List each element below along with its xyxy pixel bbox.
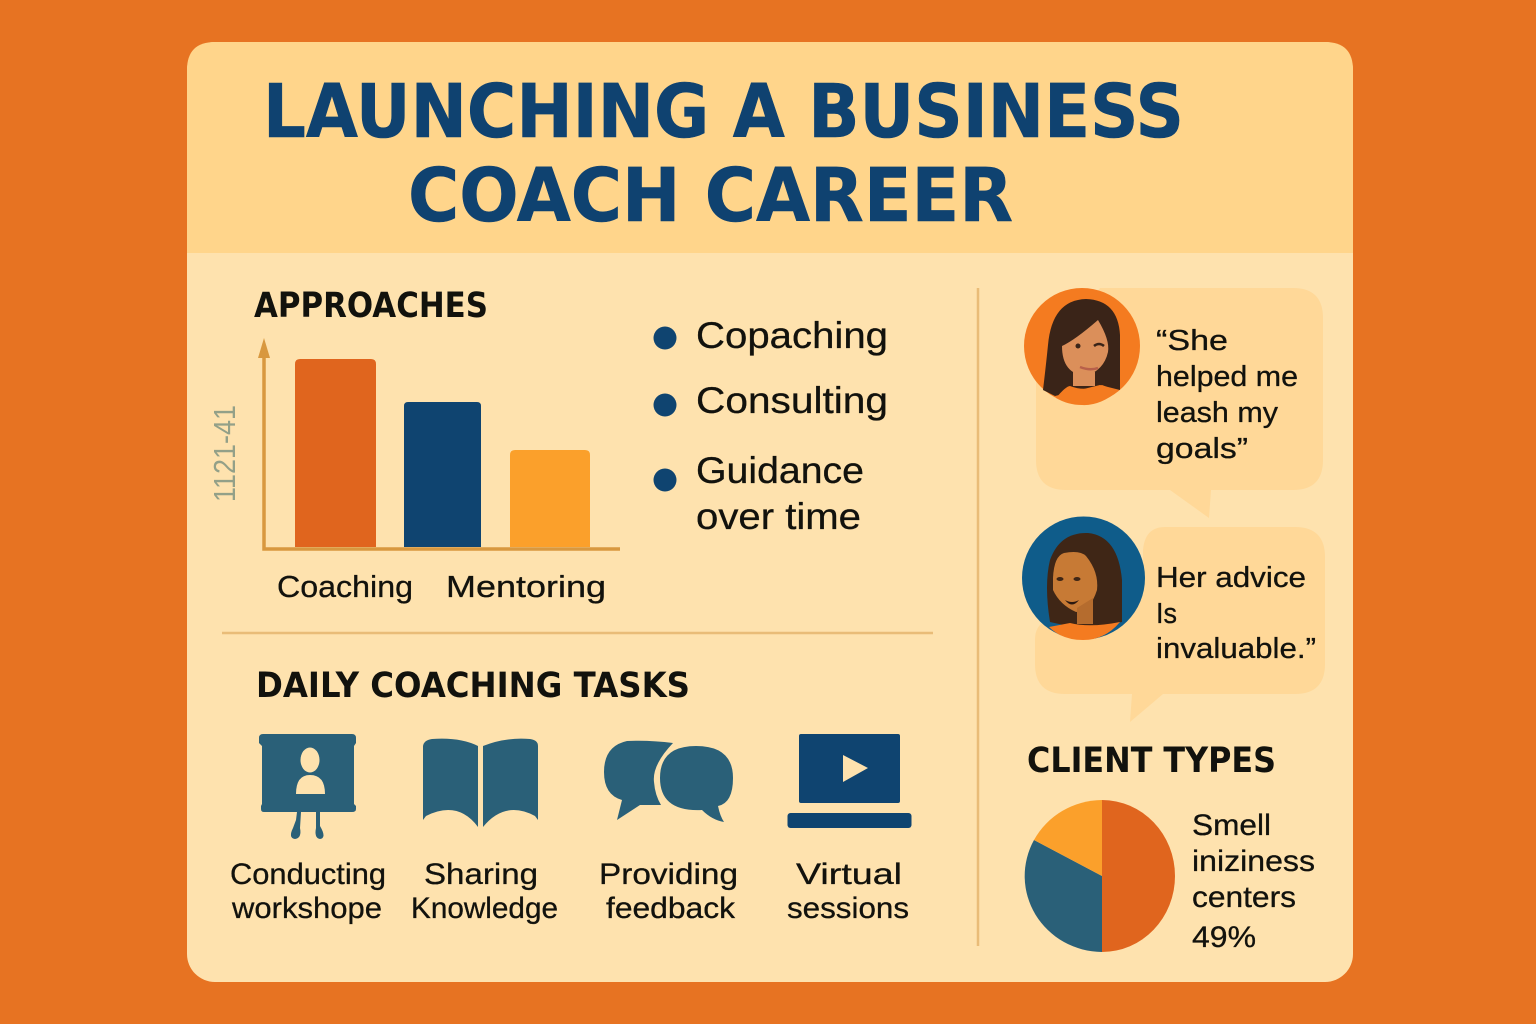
heading: approaches: APPROACHES xyxy=(254,286,488,326)
bullet list: approaches: Copaching xyxy=(696,315,888,356)
task label: sharing knowledge: Knowledge xyxy=(411,892,558,925)
task label: conducting workshops: Conducting xyxy=(230,858,386,891)
pie legend text: centers xyxy=(1192,881,1296,914)
bar: consulting xyxy=(404,402,481,547)
bar: mentoring xyxy=(510,450,590,547)
bar label: mentoring: Mentoring xyxy=(446,569,606,604)
pie legend text: 49% xyxy=(1192,921,1256,954)
bullet list: approaches xyxy=(654,315,888,537)
avatar: woman on orange xyxy=(1024,288,1140,405)
task label: virtual sessions xyxy=(787,858,909,925)
panel: header band xyxy=(187,42,1353,253)
task label: providing feedback xyxy=(599,858,738,925)
bar chart: approaches xyxy=(207,338,620,604)
task label: sharing knowledge xyxy=(411,858,558,925)
axes xyxy=(264,350,620,549)
icon: presentation board xyxy=(259,734,356,839)
task label: virtual sessions: sessions xyxy=(787,892,909,925)
title: LAUNCHING A BUSINESS xyxy=(263,69,1184,155)
heading: daily coaching tasks: DAILY COACHING TASKS xyxy=(256,666,690,706)
icon: speech bubbles xyxy=(604,741,733,822)
avatar: woman on blue xyxy=(1022,516,1145,640)
slice: 49% xyxy=(1102,800,1175,952)
pie legend text xyxy=(1192,809,1315,954)
testimonial bubble 2: Her advice xyxy=(1156,562,1306,594)
task label: providing feedback: feedback xyxy=(606,892,736,925)
icon: open book xyxy=(423,739,538,827)
title xyxy=(263,69,1184,239)
task label: providing feedback: Providing xyxy=(599,858,738,891)
testimonial bubble 1: “She xyxy=(1156,325,1228,357)
bullet list: approaches: over time xyxy=(696,496,861,537)
title: COACH CAREER xyxy=(408,153,1013,239)
task label: conducting workshops xyxy=(230,858,386,925)
axis arrow xyxy=(258,338,270,358)
task label: conducting workshops: workshope xyxy=(231,892,382,925)
pie legend text: Smell xyxy=(1192,809,1271,842)
slice: blue xyxy=(1025,840,1102,952)
testimonial bubble 2: Is xyxy=(1156,598,1177,630)
testimonial bubble 2: invaluable.” xyxy=(1156,633,1316,665)
task label: virtual sessions: Virtual xyxy=(796,858,902,891)
slice: yellow xyxy=(1034,800,1102,876)
testimonial bubble 1: leash my xyxy=(1156,397,1279,429)
task label: sharing knowledge: Sharing xyxy=(424,858,538,891)
testimonial bubble 1: goals” xyxy=(1156,433,1248,465)
pie legend text: iniziness xyxy=(1192,845,1315,878)
icon: video screen xyxy=(788,734,912,828)
bar: coaching xyxy=(295,359,376,547)
bar label: coaching: Coaching xyxy=(277,569,413,604)
panel: main card xyxy=(187,42,1353,982)
pie chart: client types xyxy=(1025,800,1175,952)
bullet list: approaches: Guidance xyxy=(696,450,864,491)
testimonial bubble 1 xyxy=(1036,288,1323,518)
testimonial bubble 1: helped me xyxy=(1156,361,1298,393)
bullet list: approaches: Consulting xyxy=(696,380,888,421)
testimonial bubble 2 xyxy=(1035,527,1325,722)
y axis label: 1121-41 xyxy=(207,405,242,502)
heading: client types: CLIENT TYPES xyxy=(1027,741,1276,781)
